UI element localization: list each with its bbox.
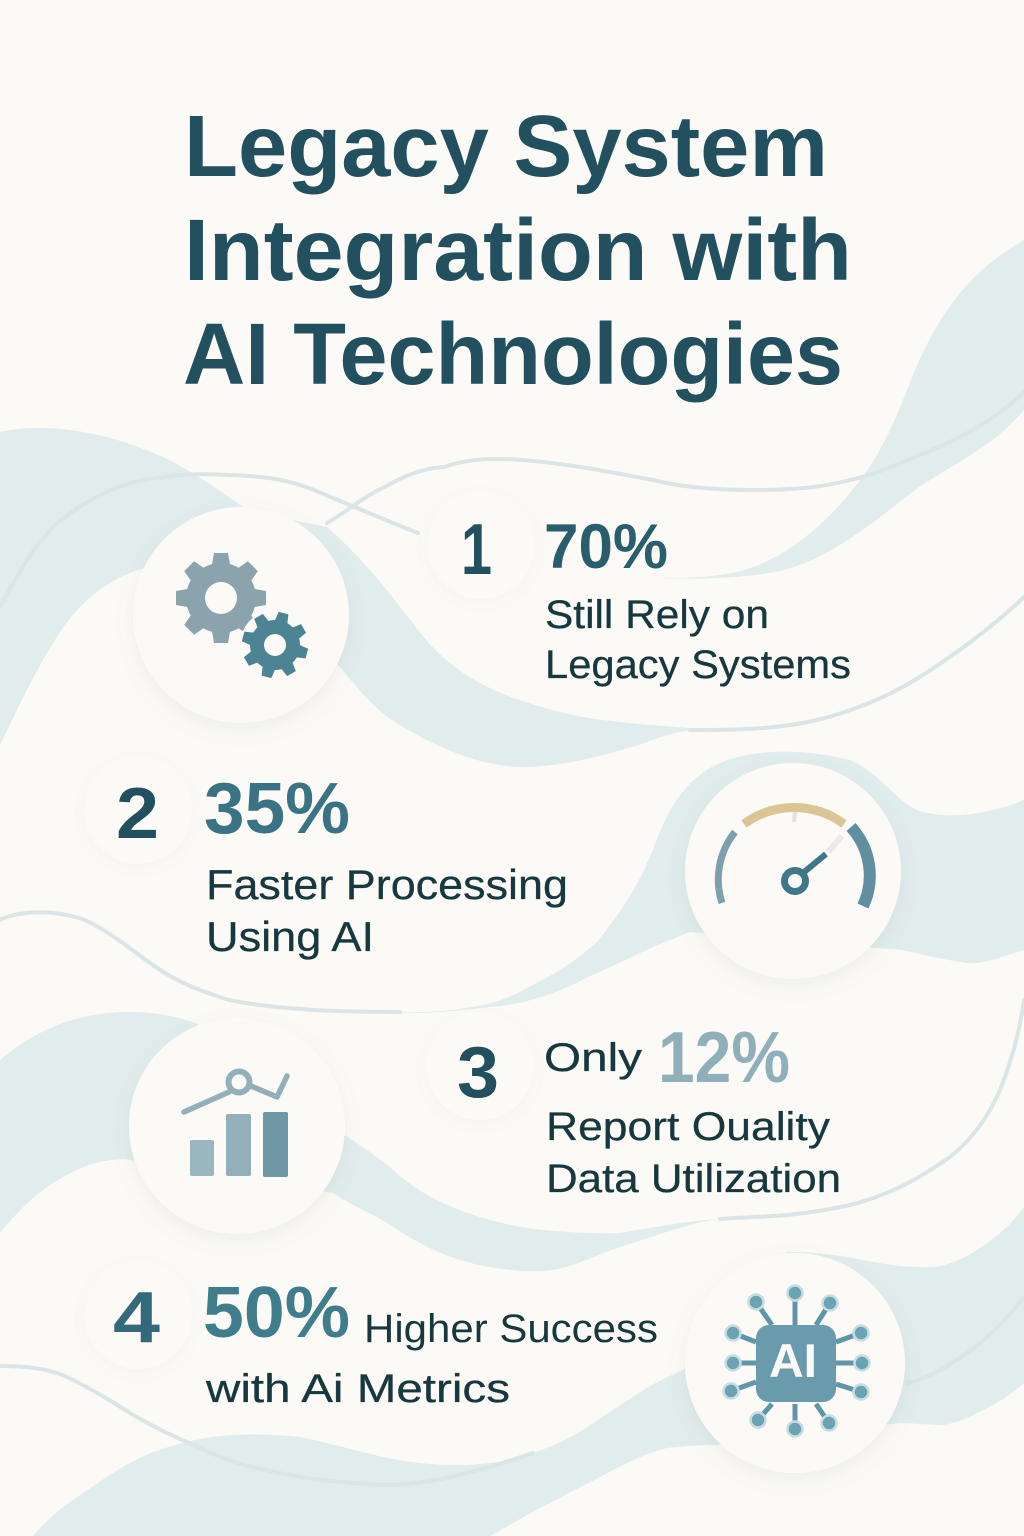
item 2: statistic text: Faster Processing [206,861,568,908]
icon: bar chart with trend line [184,1072,288,1177]
item 3: statistic text: Data Utilization [546,1157,841,1201]
item 3: statistic text: Report Ouality [546,1105,830,1149]
item 3: number badge [426,1012,534,1120]
item 4: statistic text: with Ai Metrics [205,1367,510,1411]
item 4: statistic text: Higher Success [364,1307,658,1351]
title: AI Technologies [183,306,843,403]
item 4: statistic text [203,1273,658,1411]
item 1: statistic text: Legacy Systems [545,643,851,687]
title [183,98,852,403]
item 3: chart icon badge [129,1018,345,1234]
item 4: number badge [84,1261,192,1369]
item 2: gauge icon badge [685,763,901,979]
title: Legacy System [184,98,828,195]
item 2: number badge: 2 [116,774,159,854]
item 4: AI chip icon badge [685,1253,905,1473]
icon: AI chip circuit [724,1286,870,1436]
item 3: statistic text: Only [544,1036,642,1080]
item 2: statistic text: Using AI [206,913,374,960]
item 3: statistic text: 12% [658,1018,790,1098]
item 3: statistic text [544,1018,841,1201]
icon: AI chip circuit: AI [769,1334,817,1387]
item 1: number badge: 1 [461,510,492,590]
icon: small gear [240,610,310,680]
icon: speed gauge [718,807,870,906]
item 3: number badge: 3 [457,1033,499,1113]
title: Integration with [184,202,852,299]
item 2: number badge [84,756,192,864]
item 1: statistic text: 70% [544,512,668,582]
item 2: statistic text [204,769,568,960]
item 4: statistic text: 50% [203,1273,350,1353]
item 2: statistic text: 35% [204,769,350,849]
item 4: number badge: 4 [113,1278,160,1358]
icon: large gear [176,553,266,643]
item 1: gears icon badge [133,507,349,723]
item 1: statistic text: Still Rely on [545,593,769,637]
item 1: number badge [427,491,535,599]
item 1: statistic text [544,512,851,687]
